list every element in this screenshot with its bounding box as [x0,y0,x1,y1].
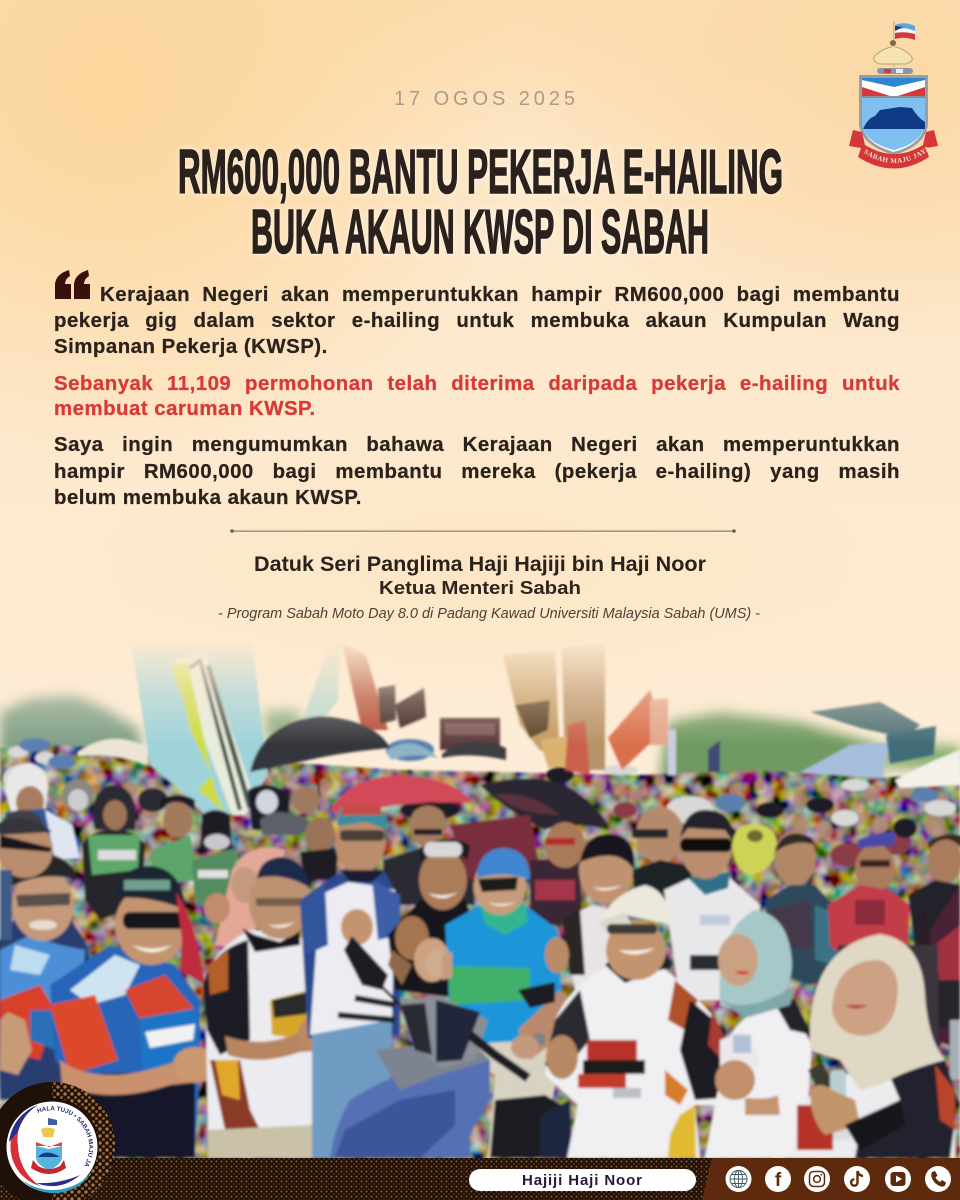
foreground figure: man 3 white jersey [201,856,314,1158]
foreground scooter [330,936,572,1158]
icon: youtube [885,1166,911,1192]
badge ring text [38,1110,89,1164]
attribution: Ketua Menteri Sabah [379,578,581,598]
foreground figure: man with cap far left [0,810,95,1100]
body paragraph 2: highlighted [54,373,900,420]
green jersey riders [92,785,136,830]
social icons [726,1166,951,1192]
body paragraph 1: Kerajaan Negeri akan memperuntukkan hampir RM600,000 bagi membantu [100,284,900,306]
crest ribbon [849,130,938,168]
body paragraph 2: highlighted: Sebanyak 11,109 permohonan telah diterima daripada pekerja e-hailing untuk [54,373,900,395]
foreground figure: man 5 black jersey, goggles [388,839,478,1000]
icon: phone [925,1166,951,1192]
checker banners [503,650,560,760]
banner: teal feather flag [132,642,268,822]
yellow mascot helmet [732,824,777,875]
crowd row with helmets [5,763,48,815]
background scenery [0,695,960,790]
body paragraph 1: pekerja gig dalam sektor e-hailing untuk membuka akaun Kumpulan Wang [54,310,900,332]
badge: dotted dark circle with emblem: HALA TUJU • SABAH MAJU JAYA [36,1106,94,1166]
icon: facebook [765,1166,791,1192]
attribution [218,553,760,622]
foreground figure: man 4 blue jersey, red cap [300,805,400,1158]
icon: globe [726,1166,752,1192]
man in red jersey [855,844,895,892]
stadium flag and tent [886,726,936,764]
body paragraph 3: hampir RM600,000 bagi membantu mereka (pekerja e-hailing) yang masih [54,461,900,483]
body paragraph 3 [54,434,900,509]
attribution: - Program Sabah Moto Day 8.0 di Padang Kawad Universiti Malaysia Sabah (UMS) - [218,606,760,622]
body paragraph 2: highlighted: membuat caruman KWSP. [54,398,316,420]
crest ribbon: SABAH MAJU JAYA [864,146,930,164]
body paragraph 3: Saya ingin mengumumkan bahawa Kerajaan Negeri akan memperuntukkan [54,434,900,456]
body paragraph 1: Simpanan Pekerja (KWSP). [54,336,328,358]
foreground figure: man black white jersey [545,834,635,990]
icon: quotation mark [55,270,90,299]
bottom bar [0,1158,960,1200]
man in black t-shirt far right [928,836,960,884]
foreground figure: man sunglasses white jersey [664,810,760,1000]
body paragraph 1 [54,284,900,358]
crest arms [874,40,913,74]
badge: dotted dark circle with emblem [0,1082,115,1200]
rear man dark suit [410,803,446,847]
name pill [469,1169,696,1191]
foreground figure: woman cream hijab [790,934,958,1158]
red flags [606,690,654,771]
crest shield [859,75,928,155]
icon: tiktok [844,1166,870,1192]
divider [230,529,736,533]
man in patterned jersey [774,830,816,886]
crest: Sabah coat of arms [849,21,938,168]
date: 17 OGOS 2025 [394,88,575,110]
umbrellas [78,739,148,765]
foreground figure: man white cap, white jersey [545,885,726,1158]
foreground figure: man 2 sunglasses, red blue jersey [50,866,217,1158]
woman pink hijab behind [204,848,285,950]
icon: facebook: f [775,1170,782,1191]
foreground figure: woman teal hijab [705,910,812,1158]
distant crowd [0,745,960,1160]
attribution: Datuk Seri Panglima Haji Hajiji bin Haji Noor [254,553,706,576]
crest flag [893,21,915,67]
body paragraph 3: belum membuka akaun KWSP. [54,487,362,509]
icon: instagram [804,1166,830,1192]
bar: brown social panel [702,1158,960,1200]
badge crest [31,1118,66,1174]
foreground figure: Hajiji, blue polo [414,848,572,1158]
name pill: Hajiji Haji Noor [522,1172,642,1189]
title [178,138,783,267]
